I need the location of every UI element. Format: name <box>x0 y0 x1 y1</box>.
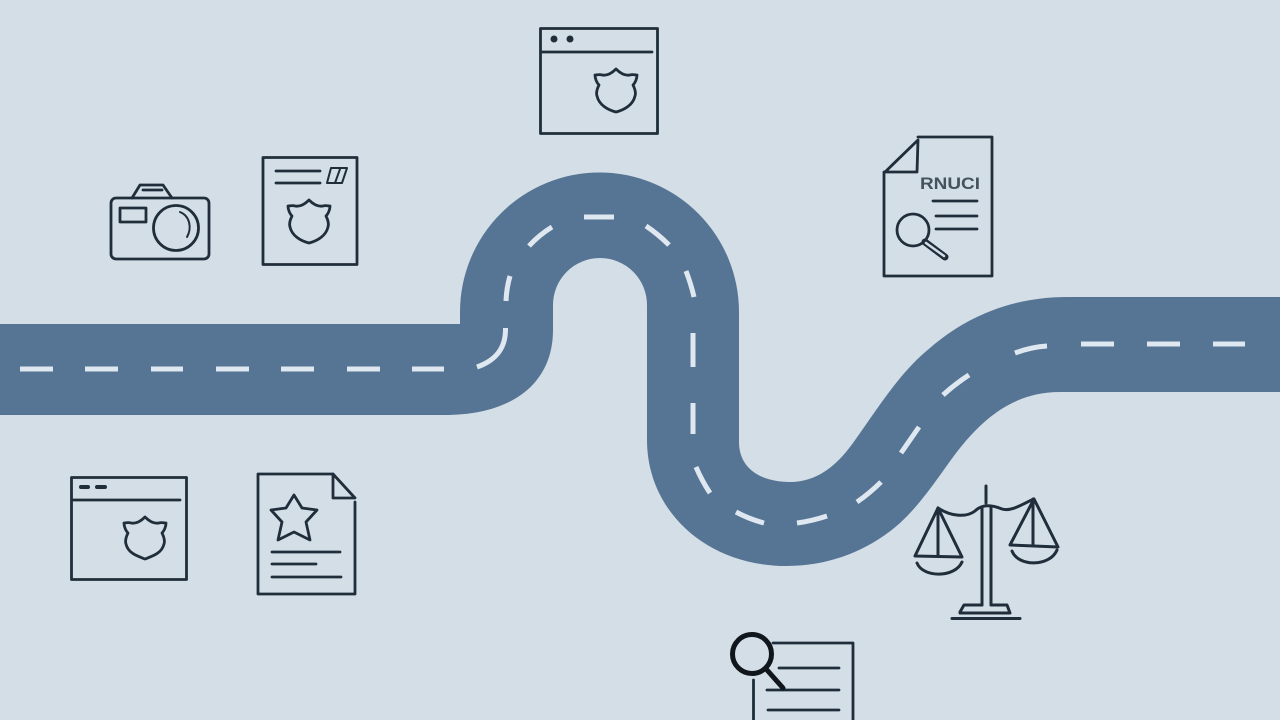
icon: camera <box>111 185 209 259</box>
winding road <box>0 172 1280 566</box>
icon: browser window with shield (top) <box>540 28 658 134</box>
icon: browser window with shield (lower left) <box>72 478 186 580</box>
icon: document with shield <box>263 158 357 264</box>
document heading text: RNUCI <box>920 174 980 193</box>
icon: document with magnifier <box>884 137 992 276</box>
icon: scales of justice <box>915 486 1058 618</box>
icon: document with bold magnifier (bottom) <box>732 634 853 720</box>
icon: document with star <box>258 474 355 594</box>
road centre dashes <box>20 217 1245 523</box>
